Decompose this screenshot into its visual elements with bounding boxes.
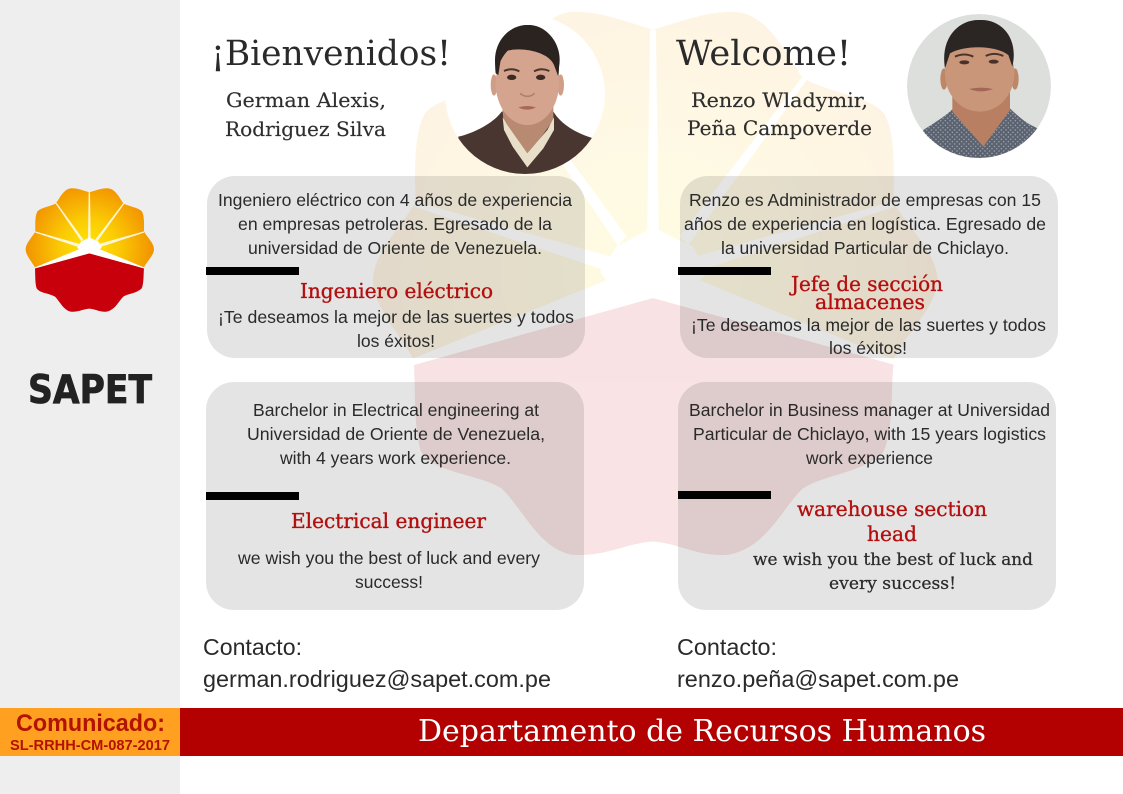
wishes: success!: [355, 572, 423, 592]
description: en empresas petroleras. Egresado de la: [238, 214, 552, 234]
description: Universidad de Oriente de Venezuela,: [247, 424, 545, 444]
contact: German: german.rodriguez@sapet.com.pe: [203, 666, 551, 692]
wishes: [218, 307, 574, 351]
contact: Renzo: renzo.peña@sapet.com.pe: [677, 666, 959, 692]
job title: Ingeniero eléctrico: [300, 279, 493, 303]
watermark logo: [373, 12, 938, 555]
job title: warehouse section: [797, 497, 987, 521]
contact: German: [203, 634, 551, 692]
job title: Jefe de sección: [789, 272, 943, 296]
wishes: [691, 315, 1046, 358]
company name: SAPET: [28, 368, 152, 413]
description: años de experiencia en logística. Egresado de: [684, 214, 1046, 234]
description: Barchelor in Business manager at Universidad: [689, 400, 1050, 420]
name: German: German Alexis,: [226, 88, 386, 112]
name: Renzo: Renzo Wladymir,: [691, 88, 868, 112]
job title: Electrical engineer: [291, 509, 486, 533]
description: work experience: [805, 448, 933, 468]
wishes: [237, 548, 540, 592]
description: Renzo es Administrador de empresas con 15: [689, 190, 1041, 210]
contact: Renzo: [677, 634, 959, 692]
footer band: department: [180, 708, 1123, 756]
wishes: we wish you the best of luck and every: [237, 548, 540, 568]
panel: Spanish profile Renzo: [678, 176, 1058, 358]
name: Renzo: Peña Campoverde: [687, 116, 872, 140]
job title: [797, 497, 987, 546]
footer badge: comunicado: Comunicado:: [16, 710, 165, 737]
contact: German: Contacto:: [203, 634, 302, 660]
heading: Welcome: Welcome!: [676, 34, 851, 74]
footer badge: comunicado: [0, 708, 180, 756]
description: [218, 190, 572, 258]
description: Ingeniero eléctrico con 4 años de experiencia: [218, 190, 572, 210]
wishes: los éxitos!: [357, 331, 435, 351]
name: German: Rodriguez Silva: [225, 117, 386, 141]
contact: Renzo: Contacto:: [677, 634, 777, 660]
name: Renzo: [687, 88, 872, 140]
description: Barchelor in Electrical engineering at: [253, 400, 539, 420]
wishes: we wish you the best of luck and: [753, 550, 1033, 570]
sidebar background: [0, 0, 180, 794]
panel: English profile Renzo: [678, 382, 1056, 610]
description: [689, 400, 1050, 468]
job title: almacenes: [815, 290, 925, 314]
wishes: [753, 550, 1033, 594]
footer badge: comunicado: SL-RRHH-CM-087-2017: [10, 738, 170, 754]
description: with 4 years work experience.: [279, 448, 511, 468]
heading: Bienvenidos: ¡Bienvenidos!: [211, 34, 451, 74]
description: universidad de Oriente de Venezuela.: [248, 238, 542, 258]
job title: head: [867, 522, 917, 546]
description: Particular de Chiclayo, with 15 years logistics: [693, 424, 1046, 444]
description: [684, 190, 1046, 258]
description: la universidad Particular de Chiclayo.: [721, 238, 1009, 258]
name: German: [225, 88, 386, 141]
panel: Spanish profile German: [206, 176, 585, 358]
photo: Renzo: [907, 14, 1051, 162]
footer title: Departamento de Recursos Humanos: [418, 714, 986, 749]
panel: English profile German: [206, 382, 584, 610]
description: [247, 400, 545, 468]
wishes: ¡Te deseamos la mejor de las suertes y todos: [691, 315, 1046, 335]
photo: German: [445, 14, 605, 180]
icon: SAPET logo: [26, 188, 154, 312]
wishes: los éxitos!: [829, 338, 907, 358]
wishes: ¡Te deseamos la mejor de las suertes y todos: [218, 307, 574, 327]
job title: [789, 272, 943, 314]
wishes: every success!: [829, 574, 956, 594]
